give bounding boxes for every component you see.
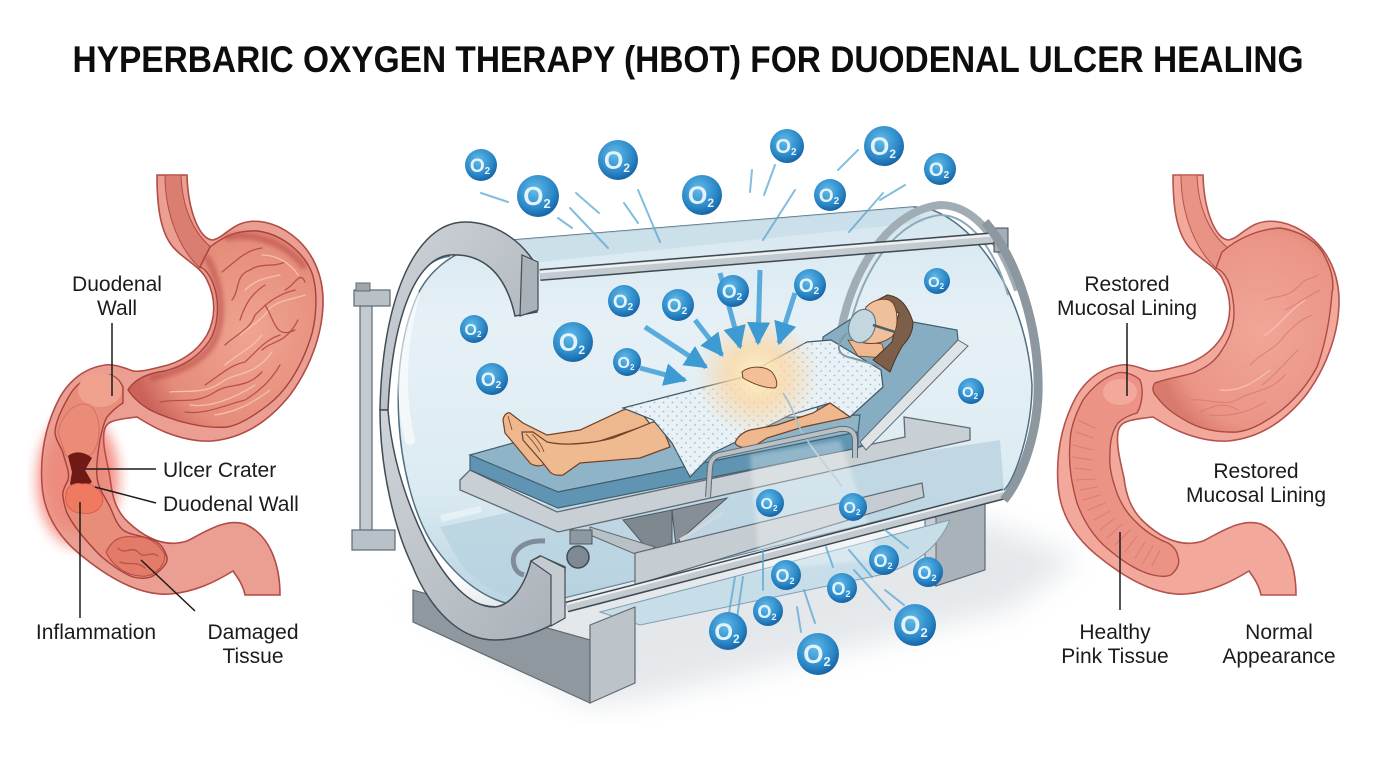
healed leader lines and labels: Healthy bbox=[1079, 621, 1151, 644]
lift structure and wheel bbox=[513, 483, 924, 585]
oxygen bubbles below chamber: 2 bbox=[888, 561, 893, 571]
toes bbox=[508, 416, 544, 452]
oxygen bubbles above chamber: 2 bbox=[889, 147, 896, 161]
healed stomach folds bbox=[1190, 275, 1320, 415]
oxygen bubbles below chamber: 2 bbox=[772, 612, 777, 622]
stomach outer wall bbox=[42, 175, 323, 595]
healed esophagus lining bbox=[1181, 175, 1228, 268]
healed duodenal folds bbox=[1073, 379, 1160, 566]
oxygen mask bbox=[839, 306, 895, 366]
oxygen bubbles below chamber: 2 bbox=[733, 632, 740, 646]
glass highlights and floor bbox=[403, 207, 1004, 601]
oxygen bubbles inside chamber: 2 bbox=[737, 292, 743, 303]
stomach cavity with folds bbox=[128, 231, 316, 427]
healed leader lines and labels: Mucosal Lining bbox=[1057, 297, 1197, 320]
glass belly below rail bbox=[600, 520, 950, 625]
floor shadow bbox=[410, 520, 1080, 705]
oxygen bubbles below chamber: O bbox=[775, 566, 790, 586]
far leg and foot bbox=[503, 409, 650, 466]
oxygen bubbles below chamber: O bbox=[803, 639, 824, 669]
left door ring lower bbox=[380, 410, 565, 640]
oxygen bubbles inside chamber: O bbox=[928, 274, 940, 291]
oxygen bubbles above chamber: 2 bbox=[544, 196, 551, 211]
oxygen bubbles inside chamber: O bbox=[618, 355, 630, 372]
oxygen flow streaks top bbox=[481, 150, 905, 248]
oxygen bubbles below chamber: 2 bbox=[932, 573, 937, 583]
mattress bbox=[470, 415, 860, 508]
glass cylinder body bbox=[398, 207, 1032, 606]
oxygen bubbles above chamber bbox=[465, 126, 956, 217]
oxygen bubbles inside chamber: O bbox=[559, 329, 578, 357]
valve clamp bbox=[513, 541, 545, 575]
left vertical post bbox=[352, 283, 395, 550]
inflammation glow bbox=[36, 412, 120, 548]
oxygen bubbles inside chamber: 2 bbox=[477, 330, 482, 339]
neck bbox=[848, 340, 886, 358]
glow over wall bbox=[44, 423, 112, 533]
oxygen bubbles inside chamber: O bbox=[722, 282, 737, 303]
oxygen bubbles above chamber: O bbox=[775, 136, 791, 158]
oxygen bubbles above chamber: 2 bbox=[707, 196, 714, 210]
oxygen bubbles inside chamber: O bbox=[481, 370, 496, 391]
oxygen bubbles inside chamber: 2 bbox=[682, 306, 688, 317]
oxygen bubbles inside chamber: O bbox=[962, 384, 974, 401]
upper rail bbox=[540, 228, 1008, 275]
oxygen bubbles above chamber: O bbox=[523, 181, 544, 211]
oxygen bubbles below chamber bbox=[709, 545, 943, 675]
concave shading bbox=[150, 236, 305, 378]
panel: healed stomach and duodenum bbox=[1057, 175, 1339, 668]
face bbox=[855, 299, 897, 344]
leader lines and labels: Duodenal bbox=[72, 273, 162, 296]
leader lines and labels: Damaged bbox=[207, 621, 299, 644]
oxygen bubbles inside chamber: 2 bbox=[628, 302, 634, 313]
ulcer crater bbox=[68, 452, 92, 488]
oxygen bubbles below chamber: O bbox=[917, 563, 932, 583]
esophagus lining bbox=[165, 175, 212, 268]
oxygen bubbles inside chamber: O bbox=[465, 322, 477, 339]
left leg support bbox=[413, 590, 635, 703]
leader lines and labels: Wall bbox=[97, 297, 137, 320]
oxygen bubbles inside chamber: 2 bbox=[856, 508, 861, 517]
healed leader lines and labels: Restored bbox=[1084, 273, 1170, 296]
healed stomach cavity bbox=[1153, 228, 1333, 432]
oxygen bubbles below chamber: O bbox=[831, 579, 846, 599]
oxygen bubbles below chamber: 2 bbox=[920, 625, 928, 640]
near leg and foot bbox=[522, 422, 670, 475]
leader lines and labels: Inflammation bbox=[36, 621, 156, 644]
bed frame tray bbox=[460, 417, 970, 532]
wheel bbox=[567, 546, 589, 568]
oxygen bubbles above chamber: O bbox=[688, 182, 707, 210]
right leg support bbox=[925, 495, 985, 586]
oxygen bubbles inside chamber: 2 bbox=[630, 363, 635, 372]
patient bbox=[503, 295, 913, 487]
oxygen bubbles below chamber: O bbox=[900, 610, 920, 640]
abdomen glow bbox=[695, 313, 819, 437]
healed leader lines and labels: Mucosal Lining bbox=[1186, 484, 1326, 507]
healed leader lines and labels: Pink Tissue bbox=[1061, 645, 1169, 668]
oxygen bubbles inside chamber: O bbox=[844, 500, 856, 517]
oxygen bubbles inside chamber: 2 bbox=[773, 504, 778, 513]
bed side rail bbox=[708, 429, 855, 497]
duodenal bulb and ulcer tissue bbox=[78, 373, 122, 407]
oxygen bubbles inside chamber: O bbox=[799, 276, 814, 297]
oxygen bubbles inside chamber: 2 bbox=[940, 282, 945, 291]
oxygen bubbles below chamber: O bbox=[873, 551, 888, 571]
oxygen bubbles above chamber: O bbox=[870, 133, 889, 161]
healed duodenal cavity bbox=[1069, 372, 1179, 576]
oxygen bubbles below chamber: 2 bbox=[824, 654, 831, 669]
lower rail bbox=[567, 491, 1004, 607]
leader lines and labels: Duodenal Wall bbox=[163, 493, 299, 516]
arrows toward abdomen bbox=[640, 270, 795, 380]
healed stomach outer wall bbox=[1058, 175, 1339, 595]
light beam bbox=[750, 440, 880, 570]
healed leader lines and labels: Normal bbox=[1245, 621, 1313, 644]
leader lines and labels bbox=[36, 273, 299, 668]
left door ring upper bbox=[380, 222, 538, 410]
backrest bbox=[815, 313, 968, 450]
healed leader lines and labels: Appearance bbox=[1222, 645, 1336, 668]
oxygen bubbles above chamber: O bbox=[604, 147, 623, 175]
healed leader lines and labels bbox=[1057, 273, 1336, 668]
IV tube bbox=[783, 393, 842, 487]
oxygen bubbles inside chamber: 2 bbox=[974, 392, 979, 401]
oxygen bubbles below chamber: O bbox=[714, 619, 733, 646]
oxygen bubbles above chamber: 2 bbox=[623, 161, 630, 175]
oxygen bubbles above chamber: O bbox=[819, 186, 834, 207]
oxygen bubbles above chamber: 2 bbox=[944, 170, 950, 181]
hair bbox=[872, 295, 913, 372]
damaged tissue bbox=[106, 537, 165, 576]
oxygen bubbles inside chamber: 2 bbox=[814, 286, 820, 297]
healed leader lines and labels: Restored bbox=[1213, 460, 1299, 483]
hand on abdomen bbox=[742, 367, 777, 388]
oxygen bubbles below chamber: 2 bbox=[846, 589, 851, 599]
oxygen bubbles above chamber: 2 bbox=[485, 166, 491, 177]
oxygen bubbles above chamber: O bbox=[470, 156, 485, 177]
oxygen bubbles inside chamber bbox=[460, 268, 984, 521]
right back ring bbox=[838, 205, 1018, 355]
near arm bbox=[735, 403, 850, 448]
oxygen bubbles inside chamber: O bbox=[613, 292, 628, 313]
oxygen flow streaks bottom bbox=[729, 530, 908, 632]
leader lines and labels: Ulcer Crater bbox=[163, 459, 276, 482]
stomach folds bbox=[160, 248, 305, 415]
right ring front arc bbox=[985, 222, 1038, 500]
oxygen bubbles above chamber: 2 bbox=[791, 147, 797, 158]
oxygen bubbles inside chamber: 2 bbox=[578, 343, 585, 357]
door inner rim bbox=[386, 255, 495, 608]
duodenal cavity bbox=[55, 374, 167, 578]
oxygen bubbles inside chamber: O bbox=[761, 496, 773, 513]
leader lines and labels: Tissue bbox=[222, 645, 284, 668]
oxygen bubbles inside chamber: 2 bbox=[496, 380, 502, 391]
oxygen bubbles above chamber: 2 bbox=[834, 196, 840, 207]
oxygen bubbles above chamber: O bbox=[929, 160, 944, 181]
panel: hyperbaric chamber bbox=[352, 126, 1080, 705]
oxygen bubbles below chamber: O bbox=[757, 602, 772, 622]
panel: ulcerated stomach and duodenum bbox=[36, 175, 323, 668]
oxygen bubbles below chamber: 2 bbox=[790, 576, 795, 586]
oxygen bubbles inside chamber: O bbox=[667, 296, 682, 317]
hospital gown bbox=[623, 340, 883, 477]
inflamed mound bbox=[66, 483, 103, 513]
